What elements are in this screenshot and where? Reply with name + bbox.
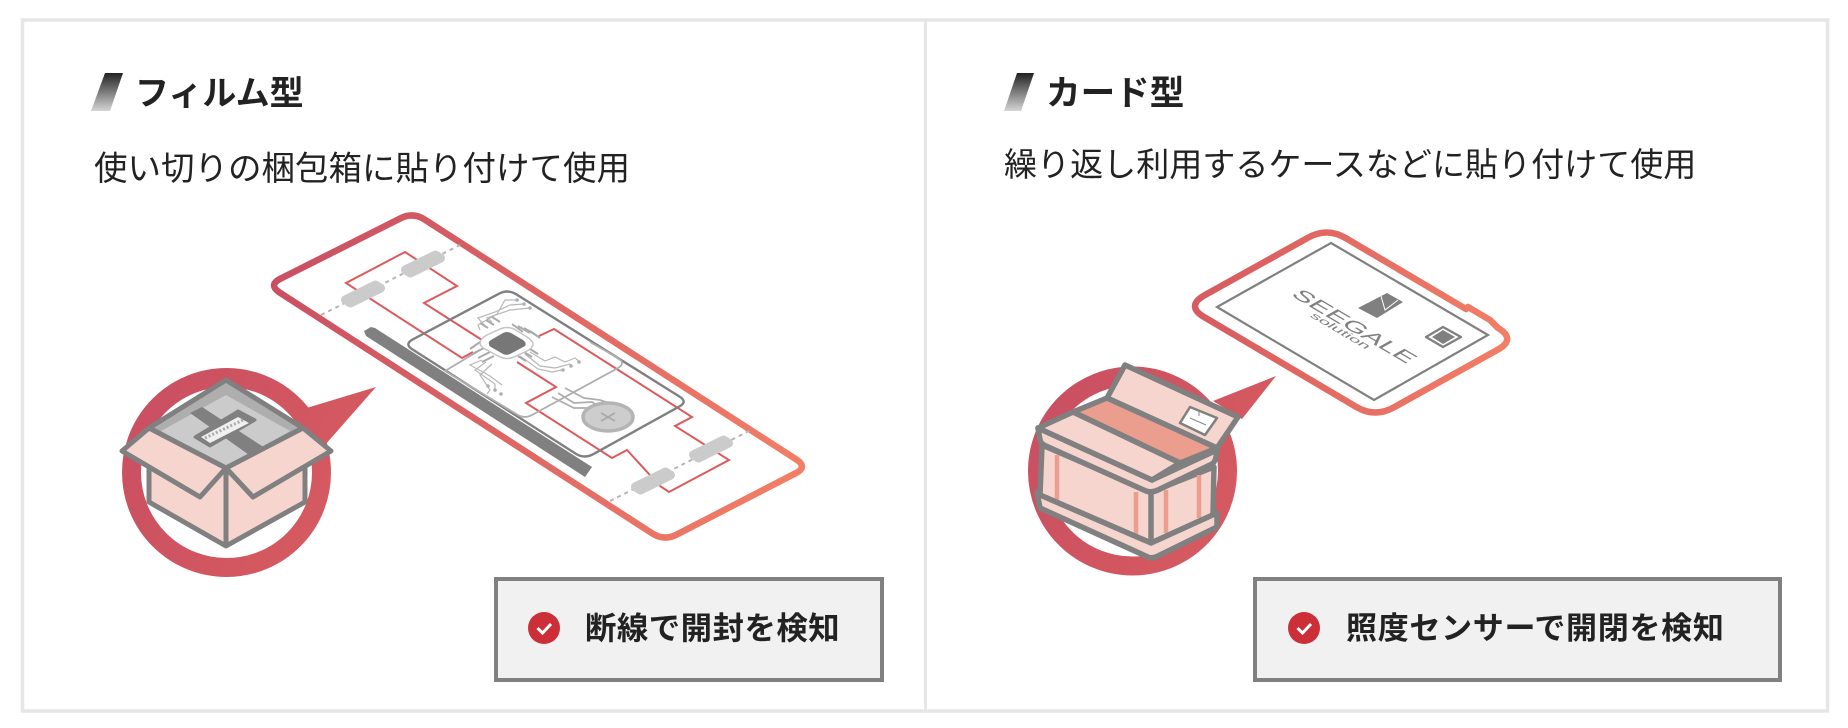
icon: check [528, 612, 560, 644]
chip mark [1426, 327, 1461, 347]
panel: card type [1004, 73, 1780, 680]
logo text: SEEGALE [1286, 287, 1422, 367]
callout box: film detection [496, 579, 882, 680]
description: card type: 繰り返し利用するケースなどに貼り付けて使用 [1004, 147, 1696, 184]
panel: film type [91, 73, 882, 680]
callout: crate with card sensor [1037, 365, 1276, 566]
sensor label [1180, 407, 1217, 435]
ring and pointer [132, 378, 376, 568]
callout box: card detection: 照度センサーで開閉を検知 [1346, 611, 1725, 646]
heading: film type: フィルム型 [135, 75, 304, 113]
description: film type: 使い切りの梱包箱に貼り付けて使用 [94, 151, 630, 188]
chip traces [470, 300, 580, 394]
coin battery [583, 403, 633, 431]
crate [1037, 365, 1238, 558]
stripes [1057, 455, 1199, 537]
battery traces [552, 388, 612, 408]
film outline [274, 215, 802, 538]
callout box: film detection: 断線で開封を検知 [585, 611, 840, 646]
illustration: film sensor tag [274, 215, 802, 538]
icon: check [1288, 612, 1320, 644]
logo icon [1358, 293, 1403, 318]
chip [470, 317, 540, 362]
carton [122, 380, 331, 546]
ring and pointer [1038, 376, 1276, 566]
dark bar [364, 327, 592, 477]
illustration: card sensor: solution [1306, 312, 1374, 351]
circuit module outline [408, 292, 684, 456]
heading: card type: カード型 [1046, 75, 1184, 113]
callout: opened carton with film sensor [122, 378, 376, 568]
dashed tear lines [321, 245, 751, 501]
card outline [1195, 232, 1507, 413]
illustration: card sensor [1195, 232, 1507, 413]
card inner frame [1217, 243, 1488, 400]
light module trace [445, 342, 622, 417]
red conductive wire [346, 252, 729, 492]
pads [346, 255, 728, 490]
callout box: card detection [1255, 579, 1780, 680]
